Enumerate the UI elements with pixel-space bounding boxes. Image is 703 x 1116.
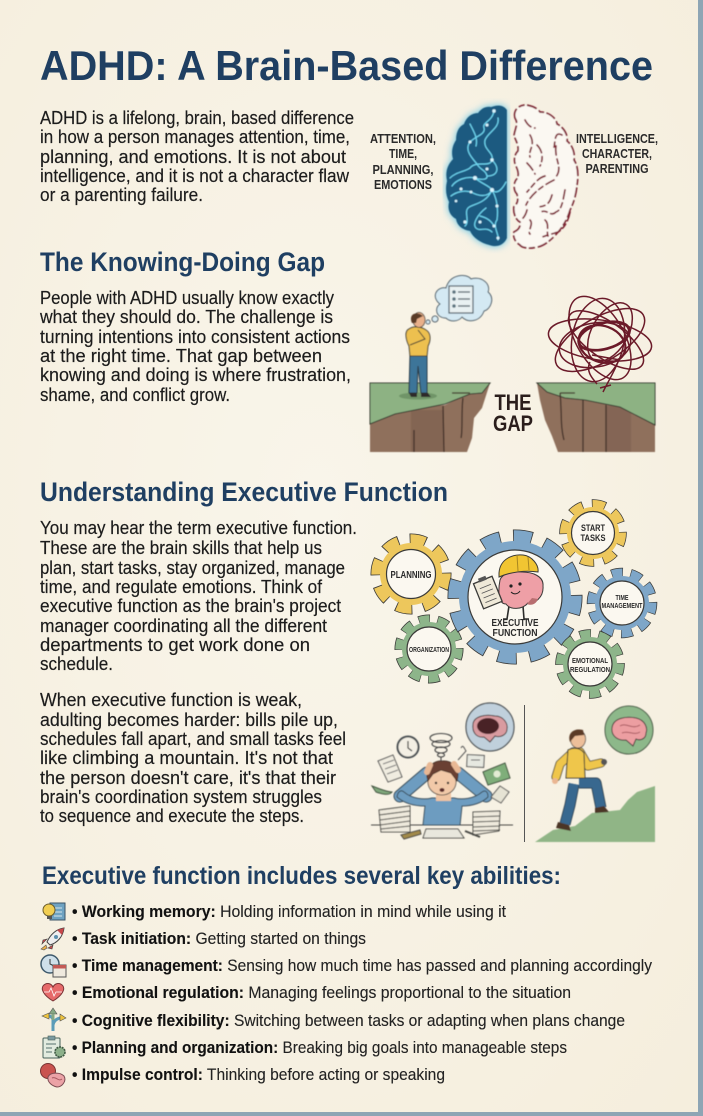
item: cognitive flexibility: • Cognitive flexibility: Switching between tasks or adapting when plans change (72, 1011, 625, 1030)
icon: note (467, 755, 484, 767)
brain illustration with labels (370, 105, 658, 248)
heading: key abilities: Executive function includes several key abilities: (42, 862, 561, 890)
left brain labels (370, 132, 436, 192)
right brain labels: PARENTING (586, 162, 648, 176)
weak executive function text (40, 690, 346, 826)
executive function definition text: manager coordinating all the different (40, 616, 327, 636)
abilities list (40, 902, 652, 1087)
paper stacks (379, 806, 500, 835)
climbing person illustration (535, 706, 655, 842)
executive function definition text: plan, start tasks, stay organized, manage (40, 558, 345, 578)
item: working memory: • Working memory: Holding information in mind while using it (72, 902, 506, 921)
gear: executive function main: FUNCTION (492, 628, 538, 639)
weak executive function text: When executive function is weak, (40, 690, 302, 710)
gear: executive function main: EXECUTIVE (492, 618, 539, 629)
weak executive function text: the person doesn't care, it's that their (40, 768, 336, 788)
right edge strip (698, 0, 703, 1116)
gap illustration (370, 276, 655, 452)
right cliff (537, 383, 655, 452)
left brain labels: PLANNING, (372, 163, 434, 177)
item: emotional regulation: • Emotional regulation: Managing feelings proportional to the situation (72, 983, 571, 1002)
icon: money (372, 763, 510, 803)
gear: organization: ORGANIZATION (409, 645, 449, 654)
gear: emotional regulation: EMOTIONAL (572, 656, 608, 665)
gap label: GAP (493, 411, 533, 436)
climber (552, 730, 609, 831)
heading: understanding executive function: Understanding Executive Function (40, 477, 448, 507)
knowing-doing gap text block: knowing and doing is where frustration, (40, 365, 351, 385)
desk papers (401, 829, 480, 839)
executive function definition text: time, and regulate emotions. Think of (40, 577, 323, 597)
item: time management: • Time management: Sensing how much time has passed and planning accordingly (72, 956, 652, 975)
icon: healthy brain circle (605, 706, 653, 754)
gear: planning (376, 539, 446, 609)
gear: start tasks (564, 504, 622, 562)
icon: clock (398, 736, 418, 758)
left brain labels: TIME, (389, 147, 417, 161)
icon: flying paper (378, 755, 402, 782)
gear: time management: TIME (616, 595, 629, 602)
gear: start tasks: TASKS (580, 533, 606, 544)
weak executive function text: like climbing a mountain. It's not that (40, 748, 333, 768)
desk line (371, 824, 513, 826)
weak executive function text: to sequence and execute the steps. (40, 806, 304, 826)
item: impulse control: • Impulse control: Thinking before acting or speaking (72, 1065, 445, 1084)
intro text block: ADHD is a lifelong, brain, based difference (40, 108, 354, 128)
icon: tangled brain circle (458, 703, 514, 760)
title: ADHD: A Brain-Based Difference (40, 42, 653, 89)
bottom edge strip (0, 1112, 703, 1116)
right brain labels: CHARACTER, (582, 147, 652, 161)
gear: organization (399, 619, 459, 679)
intro text block: planning, and emotions. It is not about (40, 147, 346, 167)
executive function definition text: executive function as the brain's project (40, 596, 341, 616)
intro text block: in how a person manages attention, time, (40, 127, 350, 147)
gap label (493, 390, 533, 436)
icon: brain mascot with hard hat and clipboard (472, 555, 543, 619)
executive function definition text (40, 518, 357, 674)
gear: executive function main (454, 536, 576, 658)
right brain labels: INTELLIGENCE, (576, 132, 658, 146)
left brain labels: ATTENTION, (370, 132, 436, 146)
intro text block: intelligence, and it is not a character flaw (40, 166, 350, 186)
person with hands on head (397, 761, 488, 825)
icon: dashed red right hemisphere (514, 105, 578, 248)
executive function definition text: departments to get work done on (40, 635, 310, 655)
overwhelmed person illustration (371, 703, 514, 839)
thinking person (399, 312, 437, 400)
weak executive function text: schedules fall apart, and small tasks feel (40, 729, 346, 749)
weak executive function text: brain's coordination system struggles (40, 787, 322, 807)
intro text block: or a parenting failure. (40, 185, 203, 205)
knowing-doing gap text block: turning intentions into consistent actions (40, 327, 350, 347)
knowing-doing gap text block (39, 288, 351, 405)
executive function definition text: You may hear the term executive function. (40, 518, 357, 538)
knowing-doing gap text block: shame, and conflict grow. (40, 385, 230, 405)
executive function definition text: These are the brain skills that help us (40, 538, 322, 558)
green hill (535, 786, 655, 842)
knowing-doing gap text block: People with ADHD usually know exactly (40, 288, 334, 308)
divider (524, 705, 526, 842)
gear: time management (592, 572, 652, 634)
executive function definition text: schedule. (40, 654, 113, 674)
heading: knowing-doing gap: The Knowing-Doing Gap (40, 247, 325, 277)
tangled scribble (546, 286, 654, 392)
item: planning and organization: • Planning and organization: Breaking big goals into manageable steps (72, 1038, 567, 1057)
knowing-doing gap text block: what they should do. The challenge is (39, 307, 333, 327)
gear: emotional regulation: REGULATION (570, 665, 610, 674)
gear: start tasks: START (581, 523, 605, 534)
weak executive function text: adulting becomes harder: bills pile up, (40, 710, 338, 730)
gear: planning: PLANNING (390, 570, 432, 581)
knowing-doing gap text block: at the right time. That gap between (40, 346, 322, 366)
icon: glowing blue left hemisphere (446, 105, 507, 246)
gear: time management: MANAGEMENT (602, 603, 643, 610)
left cliff (370, 383, 490, 452)
left brain labels: EMOTIONS (374, 178, 432, 192)
gears diagram (376, 504, 652, 694)
right brain labels (576, 132, 658, 176)
item: task initiation: • Task initiation: Getting started on things (72, 929, 366, 948)
gap label: THE (494, 390, 532, 415)
gear: emotional regulation (560, 634, 620, 694)
intro text block (40, 108, 354, 205)
icon: tornado (430, 734, 452, 761)
thought bubble with checklist (426, 276, 492, 324)
